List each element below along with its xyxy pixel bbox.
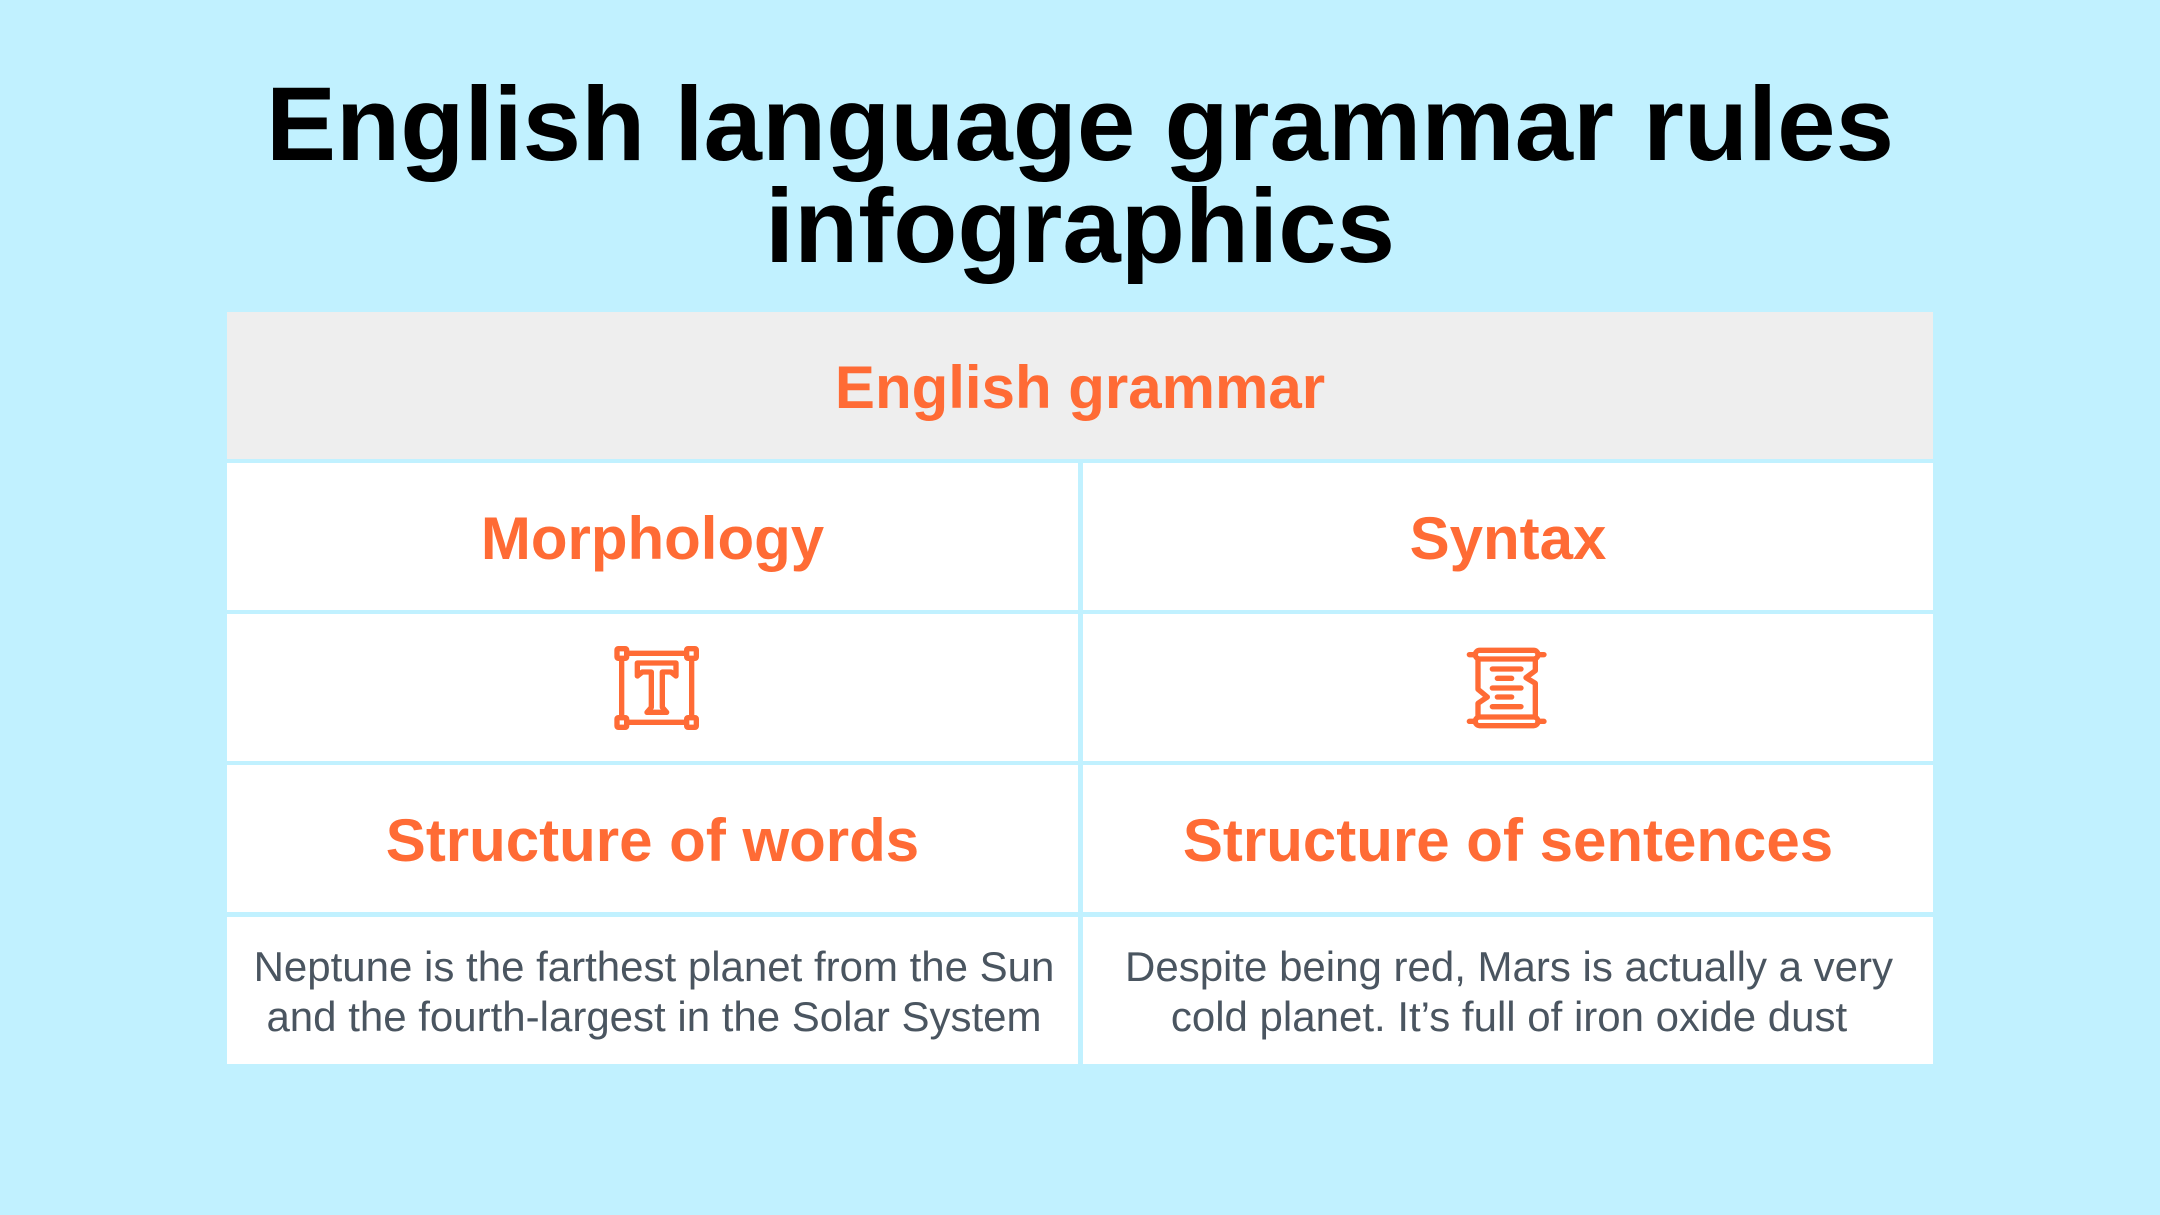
title: infographics (765, 168, 1395, 285)
subheading: Structure of sentences (1083, 765, 1933, 912)
column heading: Morphology (227, 463, 1078, 610)
column heading: Syntax (1083, 463, 1933, 610)
description: Syntax: Despite being red, Mars is actually a very (1125, 943, 1893, 990)
description: Syntax: cold planet. It’s full of iron oxide dust (1171, 993, 1847, 1040)
column heading: Syntax: Syntax (1410, 505, 1606, 572)
icon cell: Syntax (1083, 614, 1933, 761)
description: Morphology: Neptune is the farthest planet from the Sun (254, 943, 1054, 990)
subheading: Structure of sentences: Structure of sentences (1183, 807, 1833, 874)
description: Morphology: and the fourth-largest in the Solar System (266, 993, 1042, 1040)
title (266, 66, 1894, 285)
icon: paper scroll (1466, 648, 1547, 728)
description: Morphology (227, 917, 1078, 1064)
icon cell: Morphology (227, 614, 1078, 761)
title: English language grammar rules (266, 66, 1894, 183)
subheading: Structure of words: Structure of words (386, 807, 919, 874)
description: Syntax (1083, 917, 1933, 1064)
header: English grammar (227, 312, 1933, 459)
icon: letter T in selection frame (614, 646, 699, 730)
subheading: Structure of words (227, 765, 1078, 912)
table: English grammar (227, 312, 1933, 1064)
column heading: Morphology: Morphology (481, 505, 824, 572)
header: English grammar: English grammar (835, 354, 1325, 421)
